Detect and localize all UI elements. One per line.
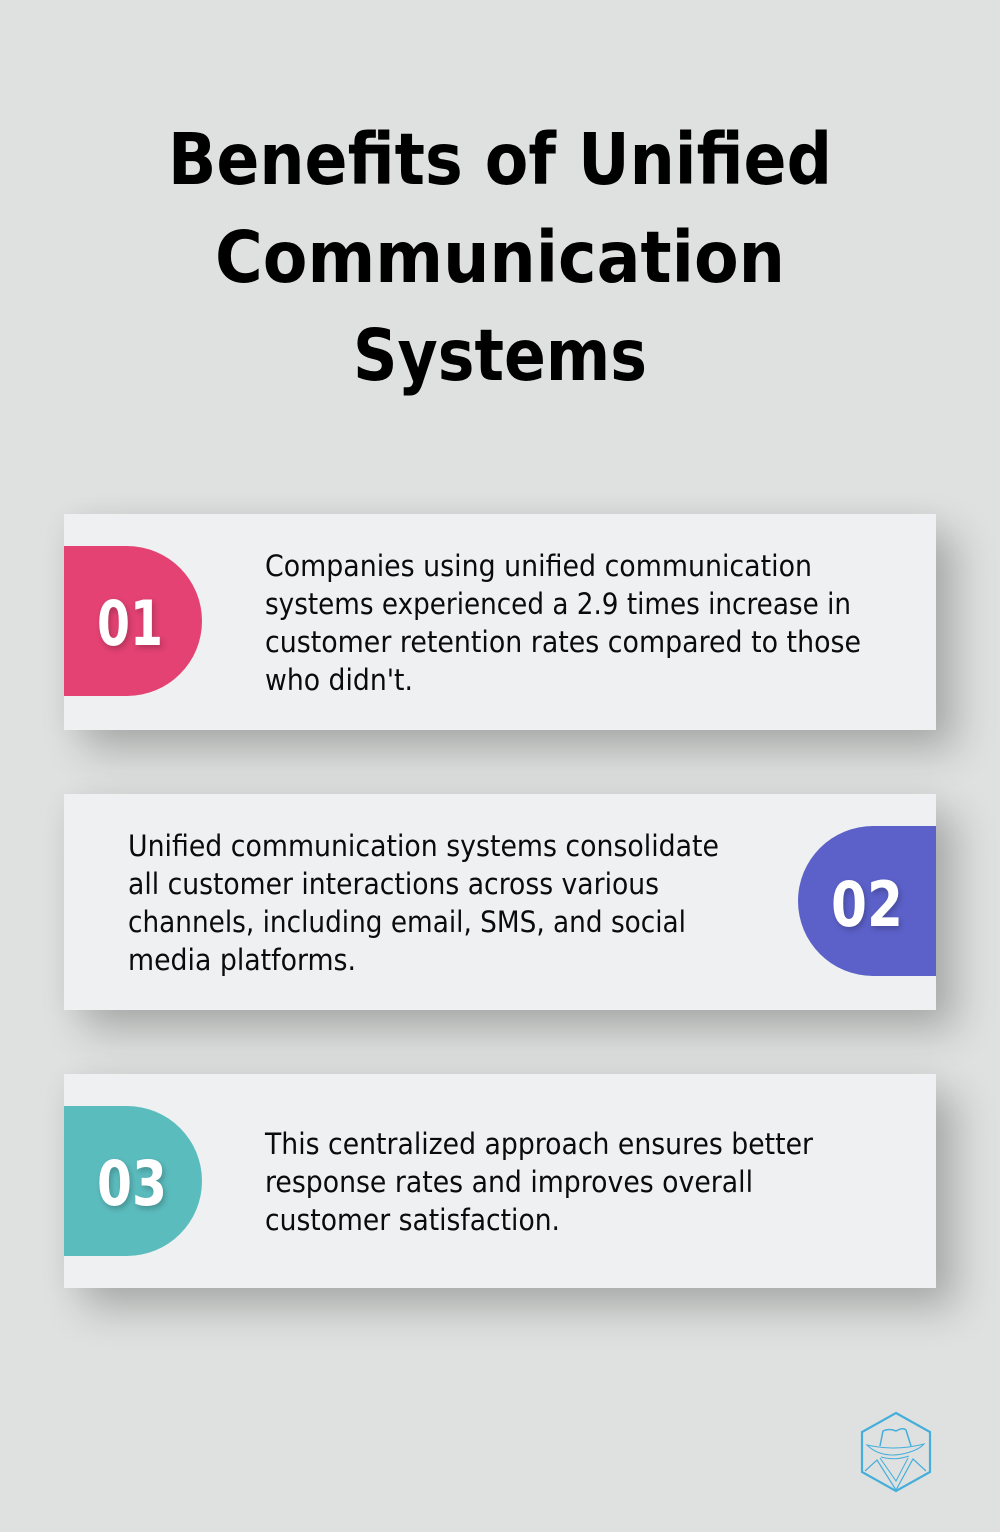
text: benefit 01 description: who didn't.	[265, 663, 413, 697]
number 01: 01	[97, 587, 163, 660]
text: benefit 02 description: Unified communication systems consolidate	[128, 829, 719, 863]
text: benefit 03 description	[264, 1127, 813, 1237]
text: benefit 03 description: This centralized approach ensures better	[264, 1127, 813, 1161]
title: Communication	[215, 216, 785, 299]
text: benefit 03 description: customer satisfaction.	[265, 1203, 560, 1237]
badge: 02	[798, 826, 936, 976]
badge: 03	[64, 1106, 202, 1256]
panel: benefit 01	[64, 514, 936, 730]
badge: 01	[64, 546, 202, 696]
panel: benefit 02	[64, 794, 936, 1010]
title	[168, 118, 832, 397]
text: benefit 01 description: Companies using unified communication	[265, 549, 812, 583]
text: benefit 01 description: systems experienced a 2.9 times increase in	[265, 587, 851, 621]
title: Systems	[353, 314, 647, 397]
number 02: 02	[831, 868, 903, 941]
number 03: 03	[97, 1147, 167, 1220]
text: benefit 02 description: media platforms.	[128, 943, 356, 977]
text: benefit 02 description	[128, 829, 719, 977]
text: benefit 01 description	[265, 549, 861, 697]
text: benefit 03 description: response rates and improves overall	[265, 1165, 753, 1199]
title: Benefits of Unified	[168, 118, 832, 201]
text: benefit 02 description: all customer interactions across various	[128, 867, 659, 901]
panel: benefit 03	[64, 1074, 936, 1288]
text: benefit 02 description: channels, including email, SMS, and social	[128, 905, 686, 939]
text: benefit 01 description: customer retention rates compared to those	[265, 625, 861, 659]
